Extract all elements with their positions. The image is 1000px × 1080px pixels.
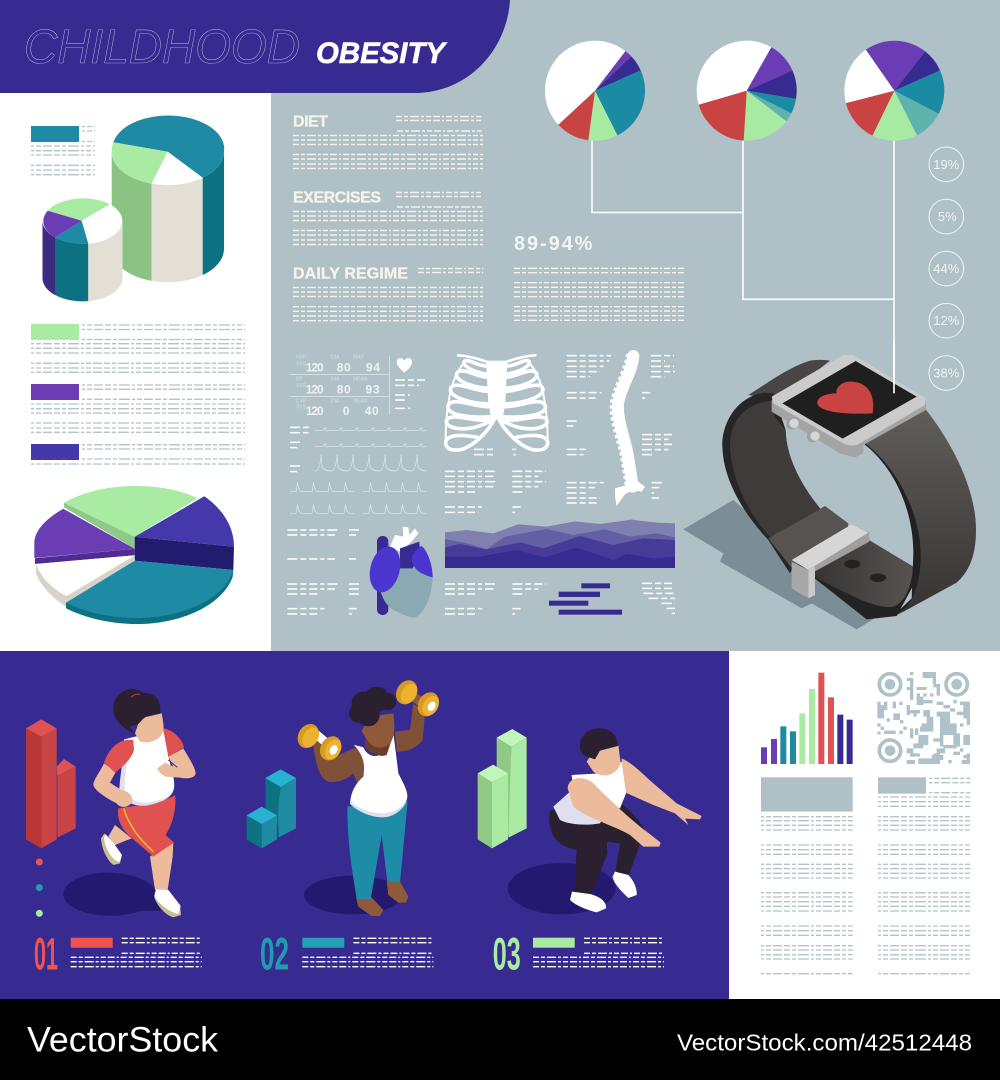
chart: pie 3 — [844, 41, 944, 141]
runner shirt — [119, 730, 174, 806]
title — [24, 21, 448, 74]
watch case top — [772, 355, 926, 445]
runner front leg — [150, 842, 173, 890]
group: exercise 03 squat — [478, 728, 702, 914]
text block: exercises — [293, 190, 483, 244]
figure neck shade — [365, 737, 392, 756]
panel: gray dashboard background — [271, 0, 1000, 651]
vitals table: 120 — [306, 382, 324, 396]
vitals table: 0 — [343, 404, 350, 418]
text block: 89-94 percent: 89-94% — [514, 233, 594, 255]
title: CHILDHOOD — [24, 21, 300, 74]
percentage badges: 44% — [933, 261, 960, 276]
icon: watch heart — [817, 382, 873, 414]
red bars — [26, 719, 76, 848]
vitals table: CVP — [296, 398, 307, 404]
vitals table: 80 — [337, 361, 351, 375]
watch connector end — [891, 340, 896, 393]
runner stripe — [124, 808, 153, 852]
watch strap tail base — [792, 540, 922, 619]
watch right strap — [865, 408, 976, 615]
text block: exercises: EXERCISES — [293, 190, 381, 206]
teal bars — [247, 769, 296, 848]
watch left strap face — [730, 401, 820, 537]
squat shoes — [570, 872, 637, 912]
figure right dumbbell — [392, 676, 443, 720]
vitals table: 120 — [306, 361, 324, 375]
label: exercise 01: 01 — [34, 928, 58, 980]
vitals table: SYS — [296, 404, 307, 410]
figure hair — [349, 687, 396, 726]
chart: pie 2 — [697, 41, 797, 141]
percentage badges: 5% — [938, 209, 957, 224]
illustration: smart watch — [683, 340, 976, 629]
panel: right column text blocks — [761, 777, 970, 974]
figure left arm — [312, 732, 365, 786]
percentage badges: 38% — [933, 366, 960, 380]
text block: daily regime — [293, 266, 483, 321]
chart: horizontal bars — [549, 583, 622, 615]
panel: left white column text blocks — [31, 126, 245, 464]
vitals table: NBP — [296, 354, 307, 360]
squat shadow — [508, 863, 616, 914]
watch strap keeper — [768, 506, 848, 570]
label: exercise 02: 02 — [260, 928, 289, 980]
squat face — [587, 745, 621, 776]
squat near arm — [568, 778, 661, 847]
text block: diet: DIET — [293, 114, 328, 131]
vitals table: DIA — [331, 354, 340, 360]
figure feet — [356, 882, 408, 916]
illustration: spine — [611, 354, 645, 506]
watch buckle — [792, 524, 869, 598]
panel: footer bar — [0, 999, 1000, 1080]
figure shadow — [304, 876, 403, 914]
panel: medical small captions — [287, 356, 675, 614]
vitals table: 120 — [306, 404, 324, 418]
chart: layered area chart — [445, 520, 675, 568]
ECG traces — [290, 428, 427, 513]
figure left dumbbell — [293, 720, 346, 764]
panel: header banner — [0, 0, 510, 93]
runner back shoe — [101, 833, 122, 865]
squat legs — [549, 803, 645, 894]
vitals table: DIA — [331, 376, 340, 382]
runner neck and face — [135, 713, 164, 742]
green bars — [478, 729, 527, 848]
text block: diet — [293, 114, 483, 168]
runner front shoe — [154, 890, 181, 917]
title: OBESITY — [316, 37, 448, 70]
vitals table: 93 — [366, 382, 380, 396]
chart: vertical bars — [761, 673, 853, 764]
label: exercise 03 — [493, 928, 664, 980]
vitals table: DIA — [331, 398, 340, 404]
runner left arm — [93, 763, 133, 807]
runner left sleeve — [104, 740, 134, 773]
watch right strap edge — [864, 442, 921, 616]
figure trousers — [347, 802, 408, 899]
illustration: anatomical heart — [365, 527, 433, 618]
chart: large 3D cylinder — [112, 116, 224, 282]
squat vest — [553, 792, 603, 825]
runner hair tie — [131, 694, 140, 697]
vitals table: 80 — [337, 382, 351, 396]
vitals table: MAP — [353, 354, 364, 360]
label: exercise 03: 03 — [493, 928, 521, 980]
illustration: rib cage — [446, 355, 548, 450]
watch screen — [782, 361, 917, 439]
panel: exercise section background — [0, 651, 729, 999]
watch shadow — [683, 500, 880, 629]
watch holes — [844, 560, 886, 582]
runner back leg — [108, 825, 132, 845]
figure right arm — [395, 703, 425, 752]
watch strap tail — [808, 537, 913, 607]
vitals table — [290, 354, 390, 418]
squat far arm — [622, 758, 702, 825]
runner hair — [113, 689, 160, 733]
text block: 89-94 percent — [514, 233, 684, 320]
footer url: VectorStock.com/42512448 — [677, 1030, 972, 1056]
runner watch strap — [168, 760, 177, 767]
chart: pie 1 — [545, 41, 645, 141]
label: exercise 01 — [34, 928, 202, 980]
watch left strap — [722, 393, 820, 573]
chart: small 3D cylinder — [42, 198, 123, 301]
figure vest — [350, 733, 407, 817]
colour dots — [36, 858, 43, 917]
runner shorts — [118, 795, 175, 857]
vitals table: MEAN — [353, 398, 368, 404]
runner right sleeve — [163, 728, 184, 757]
percentage badges: 12% — [933, 313, 960, 328]
chart: exploded 3D pie — [34, 486, 234, 624]
watch back strap — [748, 360, 830, 400]
squat hair — [580, 728, 618, 759]
runner shadow — [63, 873, 167, 916]
watch buttons — [786, 418, 820, 442]
vitals table: MEAN — [353, 376, 368, 382]
group: exercise 02 dumbbells — [247, 676, 443, 916]
connector lines — [592, 140, 894, 393]
vitals table: SYS — [296, 362, 307, 368]
watch case side — [772, 360, 926, 457]
vitals table: BP — [296, 376, 303, 382]
group: exercise 01 runner — [26, 689, 196, 917]
vitals table: SYS — [296, 383, 307, 389]
label: exercise 02 — [260, 928, 433, 980]
icon: QR code — [877, 672, 970, 764]
percentage badges: 19% — [933, 157, 960, 172]
icon: heart — [397, 358, 412, 372]
percentage badges — [929, 147, 964, 390]
vitals table: 40 — [365, 404, 379, 418]
footer logo: VectorStock — [27, 1021, 219, 1060]
figure face — [362, 713, 394, 748]
text block: daily regime: DAILY REGIME — [293, 266, 408, 282]
vitals table: 94 — [366, 361, 380, 375]
runner right arm — [157, 748, 196, 778]
